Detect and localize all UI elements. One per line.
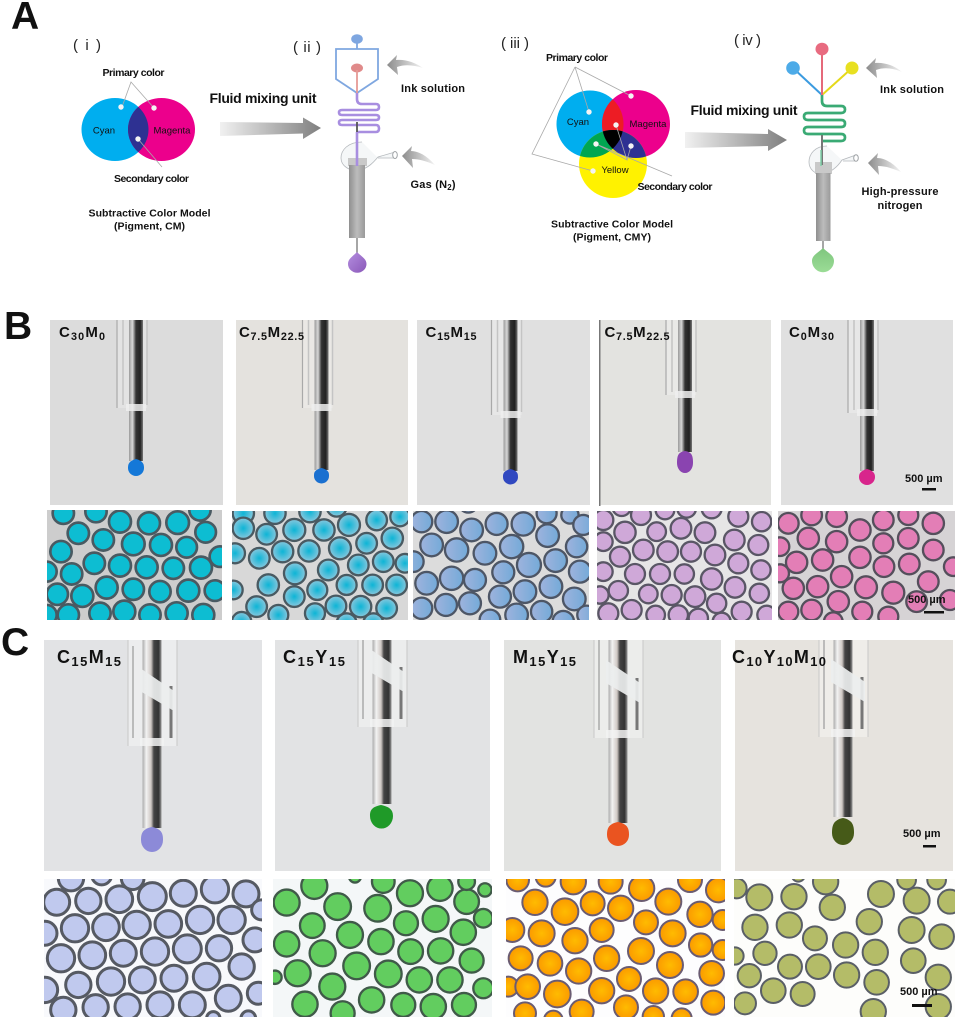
photo: C0M30: 30 bbox=[821, 331, 834, 343]
photo: C0M30: C bbox=[789, 324, 800, 341]
photo: M15Y15: Y bbox=[547, 647, 559, 667]
text: secondary color: Secondary color bbox=[638, 181, 712, 193]
photo: C10Y10M10: 10 bbox=[777, 654, 793, 669]
panel: (iv) CMY device bbox=[734, 32, 944, 272]
photo: C30M0 bbox=[50, 320, 223, 505]
photo: C30M0: 0 bbox=[99, 331, 105, 343]
label: (iii): ( iii ) bbox=[501, 35, 529, 52]
photo: C15M15: 15 bbox=[105, 654, 121, 669]
panel: (iii) CMY colour model bbox=[501, 35, 712, 244]
scale bar: C needle: 500 µm bbox=[903, 828, 941, 840]
device: ink funnel bbox=[336, 34, 378, 93]
device: three ink inlets bbox=[786, 43, 858, 95]
droplets: C10Y10M10 bbox=[734, 879, 955, 1017]
photo: C7.5M22.5 second bbox=[599, 320, 771, 506]
device: purple droplet bbox=[348, 252, 366, 273]
panel: C droplets row bbox=[44, 879, 955, 1017]
scale bar: B droplets bbox=[908, 594, 946, 614]
heading: panel C: C bbox=[1, 621, 29, 664]
photo: C7.5M22.5: C bbox=[239, 324, 250, 341]
photo: C15M15 bbox=[44, 616, 262, 871]
text: fluid mixing unit 1: Fluid mixing unit bbox=[210, 90, 317, 106]
text: fluid mixing unit 2: Fluid mixing unit bbox=[690, 102, 798, 118]
scale bar: B needle: 500 µm bbox=[905, 473, 943, 485]
photo: C15M15: M bbox=[89, 647, 104, 667]
photo: C15M15: C bbox=[426, 324, 436, 341]
venn: cyan and magenta bbox=[82, 82, 195, 167]
photo: C7.5M22.5 bbox=[236, 320, 408, 505]
device: green droplet bbox=[812, 248, 834, 272]
text: primary color: Primary color bbox=[546, 52, 608, 64]
label: (iv): ( iv ) bbox=[734, 32, 761, 49]
photo: C15M15: M bbox=[451, 324, 463, 341]
photo: C7.5M22.5: 22.5 bbox=[281, 331, 304, 343]
heading: panel B: B bbox=[4, 305, 32, 348]
photo: C10Y10M10: 10 bbox=[810, 654, 826, 669]
photo: M15Y15: 15 bbox=[560, 654, 576, 669]
text: gas: 2 bbox=[447, 183, 452, 192]
photo: C15M15: 15 bbox=[464, 331, 476, 343]
droplets: C0M30 bbox=[778, 511, 955, 620]
arrow: iii to iv bbox=[685, 129, 787, 151]
photo: C30M0: C bbox=[59, 324, 70, 341]
device: nozzle and syringe bbox=[809, 135, 858, 252]
photo: C15M15: C bbox=[57, 647, 70, 667]
photo: C0M30 bbox=[781, 303, 953, 505]
photo: C10Y10M10: M bbox=[794, 647, 809, 667]
photo: C0M30: M bbox=[808, 324, 820, 341]
photo: C30M0: 30 bbox=[71, 331, 84, 343]
arrow: gas bbox=[402, 146, 435, 168]
device: purple serpentine mixer bbox=[339, 93, 379, 132]
scale bar: B needle bbox=[905, 474, 942, 490]
photo: C10Y10M10: 10 bbox=[746, 654, 762, 669]
photo: C15M15: 15 bbox=[437, 331, 450, 343]
photo: C15Y15 bbox=[275, 640, 490, 871]
photo: C7.5M22.5 second: C bbox=[604, 324, 615, 341]
panel: B needle photographs bbox=[50, 320, 953, 506]
panel: (i) CM colour model bbox=[73, 37, 211, 232]
label: (i): ( i ) bbox=[73, 37, 101, 54]
arrow: high-pressure nitrogen bbox=[868, 153, 901, 175]
photo: C0M30: 0 bbox=[801, 331, 807, 343]
device: nozzle and syringe bbox=[341, 122, 397, 254]
arrow: ink solution bbox=[387, 55, 423, 75]
panel: (ii) CM device bbox=[293, 34, 465, 273]
venn: cyan magenta yellow: Yellow bbox=[601, 165, 629, 176]
photo: C7.5M22.5: M bbox=[268, 324, 280, 341]
scale bar: C droplets: 500 µm bbox=[900, 986, 938, 998]
droplets: C15Y15 bbox=[268, 870, 493, 1018]
droplets: C15M15 bbox=[44, 879, 262, 1017]
photo: C10Y10M10 bbox=[732, 640, 953, 871]
droplets: M15Y15 bbox=[506, 879, 725, 1017]
text: ink solution: Ink solution bbox=[880, 84, 944, 96]
photo: C15Y15: Y bbox=[315, 647, 327, 667]
photo: C30M0: M bbox=[85, 324, 98, 341]
text: secondary color: Secondary color bbox=[114, 173, 189, 185]
photo: C7.5M22.5 second: 22.5 bbox=[646, 331, 670, 343]
venn: cyan and magenta: Magenta bbox=[154, 126, 191, 136]
photo: M15Y15: 15 bbox=[529, 654, 545, 669]
text: high-pressure: High-pressure bbox=[862, 186, 938, 198]
venn: cyan and magenta: Cyan bbox=[93, 126, 115, 136]
photo: C10Y10M10: Y bbox=[763, 647, 775, 667]
text: primary color: Primary color bbox=[102, 67, 164, 79]
scale bar: C droplets bbox=[900, 986, 938, 1007]
droplets: C7.5M22.5 second bbox=[597, 511, 772, 620]
venn: cyan magenta yellow: Magenta bbox=[630, 119, 667, 130]
text: model caption: Subtractive Color Model bbox=[551, 218, 673, 230]
arrow: i to ii bbox=[220, 118, 321, 139]
text: gas: Gas (N bbox=[410, 179, 447, 191]
photo: C15Y15: C bbox=[283, 647, 296, 667]
droplets: C30M0 bbox=[47, 510, 222, 620]
photo: C15Y15: 15 bbox=[329, 654, 345, 669]
photo: C7.5M22.5: 7.5 bbox=[251, 331, 267, 343]
arrow: ink solution bbox=[866, 58, 902, 78]
text: model caption: Subtractive Color Model bbox=[88, 208, 211, 220]
venn: cyan magenta yellow bbox=[532, 67, 672, 198]
photo: C7.5M22.5 second: 7.5 bbox=[616, 331, 632, 343]
scale bar: B droplets: 500 µm bbox=[908, 594, 946, 606]
panel: C needle photographs bbox=[44, 640, 953, 871]
droplets: C15M15 bbox=[413, 511, 589, 620]
scale bar: C needle bbox=[903, 828, 941, 848]
label: (ii): ( ii ) bbox=[293, 39, 321, 56]
text: ink solution: Ink solution bbox=[401, 83, 465, 95]
photo: C15Y15: 15 bbox=[298, 654, 314, 669]
photo: C10Y10M10: C bbox=[732, 647, 745, 667]
device: green serpentine mixer bbox=[804, 95, 845, 141]
text: gas: ) bbox=[452, 179, 456, 191]
photo: M15Y15 bbox=[504, 640, 721, 871]
panel: B droplets row bbox=[47, 510, 955, 620]
text: model caption line 2: (Pigment, CM) bbox=[114, 220, 185, 232]
text: model caption line 2: (Pigment, CMY) bbox=[573, 232, 651, 244]
photo: C7.5M22.5 second: M bbox=[633, 324, 646, 341]
photo: M15Y15: M bbox=[513, 647, 528, 667]
photo: C15M15 bbox=[417, 305, 590, 505]
venn: cyan magenta yellow: Cyan bbox=[567, 117, 589, 128]
droplets: C7.5M22.5 bbox=[232, 511, 408, 620]
text: nitrogen: nitrogen bbox=[878, 200, 923, 212]
photo: C15M15: 15 bbox=[71, 654, 87, 669]
